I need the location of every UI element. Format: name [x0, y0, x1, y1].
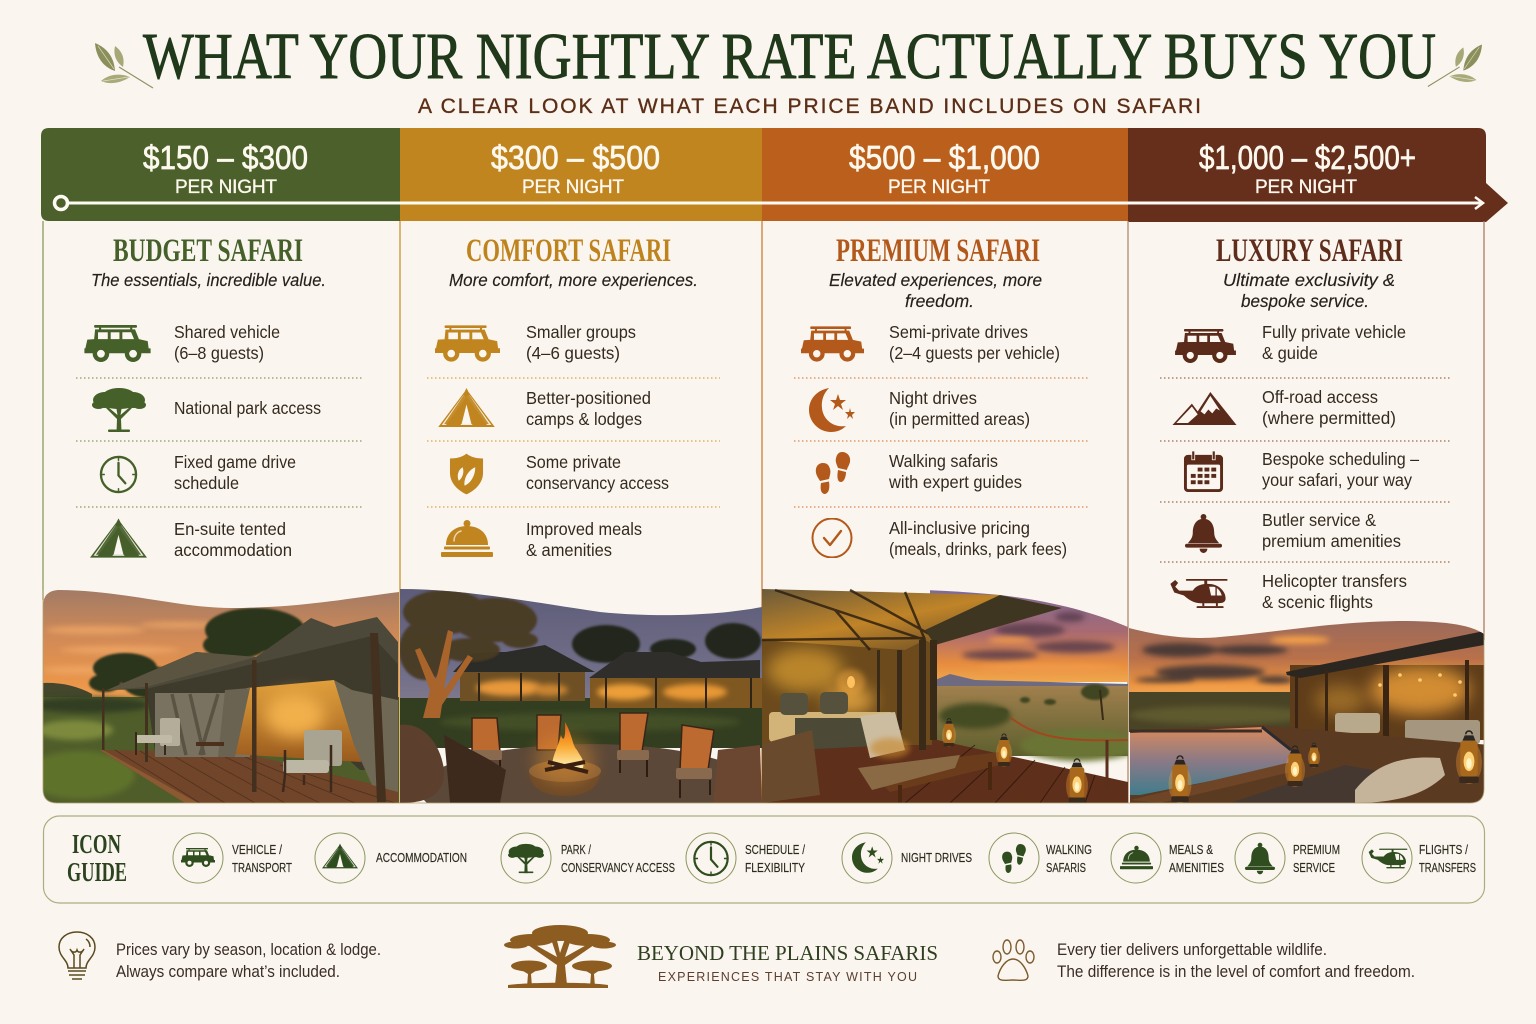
- footer note: every tier: The difference is in the level of comfort and freedom.: [1057, 962, 1415, 981]
- row: bespoke scheduling: Bespoke scheduling –: [1262, 449, 1419, 469]
- row: conservancy access: conservancy access: [526, 473, 669, 493]
- timeline arrow: [54, 196, 1483, 210]
- icon guide heading: [67, 829, 127, 887]
- guide: vehicle: [173, 833, 292, 883]
- row: tented accommodation: accommodation: [174, 540, 292, 560]
- row: night drives: Night drives: [889, 388, 977, 408]
- row: helicopter transfers: [1170, 571, 1407, 612]
- guide: schedule: FLEXIBILITY: [745, 861, 806, 875]
- row: fixed schedule: Fixed game drive: [174, 452, 296, 472]
- panel: premium safari: [794, 233, 1088, 559]
- guide: flights: [1362, 833, 1476, 883]
- band: comfort: [400, 128, 762, 221]
- guide: park access: PARK /: [561, 843, 591, 857]
- tagline: Ultimate exclusivity &: [1223, 270, 1395, 290]
- row: off-road access: (where permitted): [1262, 408, 1396, 428]
- guide: premium service: [1235, 833, 1340, 883]
- price: $300 – $500: PER NIGHT: [522, 177, 624, 198]
- price: $1,000 – $2,500+: PER NIGHT: [1255, 177, 1357, 198]
- row: semi-private drives: Semi-private drives: [889, 322, 1028, 342]
- brand logo: Beyond the Plains Safaris: EXPERIENCES THAT STAY WITH YOU: [658, 970, 917, 984]
- tagline: Elevated experiences, more: [829, 270, 1042, 290]
- guide: walking safaris: WALKING: [1046, 843, 1092, 857]
- guide: accommodation: ACCOMMODATION: [376, 851, 467, 865]
- guide: meals: AMENITIES: [1169, 861, 1224, 875]
- row: helicopter transfers: & scenic flights: [1262, 592, 1373, 612]
- row: butler service: premium amenities: [1262, 531, 1401, 551]
- photo frame border: [43, 590, 1484, 803]
- row: better camps: Better-positioned: [526, 388, 651, 408]
- row: fixed schedule: schedule: [174, 473, 239, 493]
- row: shared vehicle: (6–8 guests): [174, 343, 264, 363]
- footer note: prices vary: [59, 932, 381, 981]
- price: $150 – $300: [143, 139, 308, 198]
- brand logo: Beyond the Plains Safaris: BEYOND THE PLAINS SAFARIS: [637, 941, 938, 965]
- tagline: The essentials, incredible value.: [91, 270, 326, 290]
- tagline: [1223, 270, 1395, 311]
- row: conservancy access: Some private: [526, 452, 621, 472]
- row: bespoke scheduling: [1184, 449, 1419, 492]
- panel: icon guide: [44, 816, 1484, 903]
- tagline: freedom.: [905, 291, 974, 311]
- row: walking safaris: with expert guides: [888, 472, 1022, 492]
- icon: light bulb: [59, 932, 95, 979]
- icon guide heading: GUIDE: [67, 857, 127, 887]
- panel: comfort safari: [427, 233, 720, 560]
- guide: schedule: SCHEDULE /: [745, 843, 805, 857]
- price band arrow ribbon: [41, 128, 1508, 222]
- row: shared vehicle: Shared vehicle: [174, 322, 280, 342]
- row: night drives: (in permitted areas): [889, 409, 1030, 429]
- heading: BUDGET SAFARI: [113, 233, 303, 269]
- row: off-road access: [1172, 387, 1396, 428]
- row: national park access: National park access: [174, 398, 321, 418]
- column divider lines: [43, 221, 1484, 803]
- row: bespoke scheduling: your safari, your way: [1262, 470, 1412, 490]
- footer note: prices vary: Prices vary by season, location & lodge.: [116, 940, 381, 959]
- band: budget: [41, 128, 400, 221]
- guide: walking safaris: [989, 833, 1092, 883]
- guide: premium service: SERVICE: [1293, 861, 1335, 875]
- band: luxury with arrow tip: [1128, 128, 1508, 222]
- guide: meals: MEALS &: [1169, 843, 1214, 857]
- row: improved meals: Improved meals: [526, 519, 642, 539]
- row: butler service: Butler service &: [1262, 510, 1376, 530]
- heading: LUXURY SAFARI: [1216, 233, 1403, 269]
- band: premium: [762, 128, 1128, 221]
- row: national park access: [92, 388, 321, 432]
- row: semi-private drives: (2–4 guests per vehicle): [889, 343, 1060, 363]
- price: $1,000 – $2,500+: [1199, 139, 1416, 198]
- row: walking safaris: Walking safaris: [889, 451, 998, 471]
- footer note: every tier: Every tier delivers unforgettable wildlife.: [1057, 940, 1327, 959]
- row: private vehicle: [1175, 322, 1406, 363]
- row: all-inclusive pricing: [812, 518, 1067, 559]
- guide: walking safaris: SAFARIS: [1046, 861, 1086, 875]
- guide: schedule: [686, 833, 806, 883]
- heading: PREMIUM SAFARI: [836, 233, 1040, 269]
- row: all-inclusive pricing: All-inclusive pricing: [889, 518, 1030, 538]
- guide: flights: TRANSFERS: [1419, 861, 1476, 875]
- row: tented accommodation: En-suite tented: [174, 519, 286, 539]
- panel: luxury safari: [1160, 233, 1452, 612]
- icon: paw print: [993, 940, 1034, 980]
- row: butler service: [1185, 510, 1401, 553]
- row: fixed schedule: [101, 452, 296, 493]
- row: conservancy access: [450, 452, 669, 494]
- icon: acacia trees: [504, 925, 616, 988]
- photo scene: luxury pool deck pavilion: [1129, 620, 1490, 803]
- row: smaller groups: [435, 322, 636, 363]
- row: smaller groups: (4–6 guests): [526, 343, 620, 363]
- row: night drives: [809, 388, 1030, 432]
- guide: vehicle: TRANSPORT: [232, 861, 292, 875]
- icon guide heading: ICON: [72, 829, 121, 859]
- row: better camps: [438, 388, 651, 429]
- footer note: every tier: [993, 940, 1415, 981]
- row: walking safaris: [816, 451, 1022, 494]
- row: improved meals: [441, 519, 642, 560]
- price: $300 – $500: $300 – $500: [491, 139, 660, 176]
- price: $500 – $1,000: PER NIGHT: [888, 177, 990, 198]
- price: $300 – $500: [491, 139, 660, 198]
- guide: vehicle: VEHICLE /: [232, 843, 282, 857]
- panel: budget safari: [76, 233, 364, 560]
- row: semi-private drives: [801, 322, 1060, 363]
- row: private vehicle: Fully private vehicle: [1262, 322, 1406, 342]
- heading: COMFORT SAFARI: [466, 233, 671, 269]
- subtitle: A CLEAR LOOK AT WHAT EACH PRICE BAND INCLUDES ON SAFARI: [418, 95, 1201, 118]
- row: helicopter transfers: Helicopter transfers: [1262, 571, 1407, 591]
- row: all-inclusive pricing: (meals, drinks, park fees): [889, 539, 1067, 559]
- footer note: prices vary: Always compare what’s included.: [116, 962, 340, 981]
- price: $500 – $1,000: [849, 139, 1040, 198]
- price: $150 – $300: PER NIGHT: [175, 177, 277, 198]
- row: better camps: camps & lodges: [526, 409, 642, 429]
- guide: park access: [501, 833, 675, 883]
- row: tented accommodation: [90, 518, 292, 560]
- guide: premium service: PREMIUM: [1293, 843, 1340, 857]
- guide: flights: FLIGHTS /: [1419, 843, 1468, 857]
- tagline: [829, 270, 1042, 311]
- guide: accommodation: [315, 833, 467, 883]
- photo scene: premium tent with savanna view: [762, 589, 1140, 804]
- guide: park access: CONSERVANCY ACCESS: [561, 861, 675, 875]
- row: smaller groups: Smaller groups: [526, 322, 636, 342]
- brand logo: Beyond the Plains Safaris: [504, 925, 938, 988]
- price: $150 – $300: $150 – $300: [143, 139, 308, 176]
- row: private vehicle: & guide: [1262, 343, 1318, 363]
- icon: right leaf sprig: [1428, 45, 1482, 87]
- price: $1,000 – $2,500+: $1,000 – $2,500+: [1199, 139, 1416, 176]
- guide: meals: [1111, 833, 1224, 883]
- photo scene: budget tented camp at sunset: [25, 588, 400, 807]
- photo scene: comfort lodge with firepit: [400, 589, 762, 803]
- icon: left leaf sprig: [95, 43, 153, 88]
- tagline: bespoke service.: [1241, 291, 1369, 311]
- guide: night drives: [842, 833, 972, 883]
- price: $500 – $1,000: $500 – $1,000: [849, 139, 1040, 176]
- row: improved meals: & amenities: [526, 540, 612, 560]
- row: shared vehicle: [84, 322, 280, 363]
- header: title and subtitle: [95, 20, 1482, 118]
- tagline: More comfort, more experiences.: [449, 270, 698, 290]
- row: off-road access: Off-road access: [1262, 387, 1378, 407]
- guide: night drives: NIGHT DRIVES: [901, 851, 972, 865]
